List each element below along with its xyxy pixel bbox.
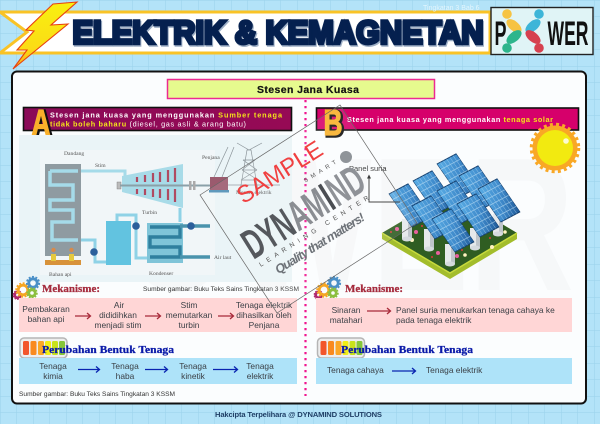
diagram labels: Kondenser <box>149 271 173 277</box>
title: ELEKTRIK & KEMAGNETAN <box>74 16 484 52</box>
turbine <box>117 164 210 208</box>
tank and pipes <box>81 208 180 265</box>
generator <box>209 177 229 192</box>
icon: letter B: B <box>325 103 344 144</box>
logo: POWER: P <box>494 15 506 53</box>
watermark: sample stamp: SAMPLE <box>232 136 328 210</box>
panel: left mechanism flow: Tenaga elektrik <box>236 300 293 310</box>
left energy heading <box>20 338 175 358</box>
title banner <box>0 12 490 53</box>
diagram labels: Air laut <box>214 255 232 261</box>
panel: right mechanism flow: Panel suria menukarkan tenaga cahaya ke <box>396 305 555 315</box>
logo: POWER <box>491 8 593 54</box>
panel: right energy flow: Tenaga elektrik <box>426 365 483 375</box>
panel: left mechanism flow: Penjana <box>249 320 280 330</box>
diagram labels: Bahan api <box>49 272 72 278</box>
right mechanism heading <box>314 277 403 299</box>
panel: section A header <box>24 102 292 144</box>
chapter label: Tingkatan 3 Bab 6 <box>423 5 480 12</box>
boiler <box>45 164 125 265</box>
panel: left mechanism flow: dididihkan <box>99 310 137 320</box>
diagram: power station <box>19 135 292 282</box>
panel: right energy flow <box>316 358 572 384</box>
panel: left energy flow: Tenaga <box>39 361 67 371</box>
panel: left energy flow: kimia <box>43 371 63 381</box>
panel: left energy flow: haba <box>116 371 135 381</box>
watermark: sample stamp <box>200 105 417 313</box>
footer: Hakcipta Terpelihara @ DYNAMIND SOLUTIONS <box>215 410 382 419</box>
heading: Stesen Jana Kuasa: Stesen Jana Kuasa <box>257 84 359 96</box>
panel: left mechanism flow: dihasilkan oleh <box>236 310 292 320</box>
diagram labels: Menara elektrik <box>236 190 272 196</box>
right energy heading: Perubahan Bentuk Tenaga <box>341 345 474 356</box>
panel: left mechanism flow: Pembakaran <box>22 304 70 314</box>
panel: left energy flow: Tenaga <box>179 361 207 371</box>
condenser <box>147 222 210 263</box>
icon: letter B: B <box>324 102 342 143</box>
left mechanism heading <box>13 277 100 299</box>
title: ELEKTRIK & KEMAGNETAN <box>72 14 484 50</box>
image source note: Sumber gambar: Buku Teks Sains Tingkatan 3 KSSM <box>19 391 175 398</box>
watermark: sample stamp: SMART <box>303 160 338 184</box>
callout: panel suria: Panel suria <box>349 164 387 173</box>
panel: section A header: tidak boleh baharu (diesel, gas asli & arang batu) <box>50 120 246 128</box>
callout: panel suria <box>349 164 400 202</box>
panel: section A header: Stesen jana kuasa yang menggunakan Sumber tenaga <box>50 110 283 120</box>
panel: left energy flow: Tenaga <box>111 361 139 371</box>
diagram labels: Penjana <box>202 155 220 161</box>
diagram labels <box>49 151 272 278</box>
divider <box>304 100 307 396</box>
watermark: sample stamp: DYNAMIND <box>233 156 373 268</box>
diagram labels: Turbin <box>142 210 157 216</box>
watermark: sample stamp: LEARNING CENTER <box>258 195 371 269</box>
left mechanism heading: Mekanisme: <box>42 284 100 295</box>
pylon <box>214 143 280 191</box>
watermark: sample stamp: Quality that matters! <box>272 210 367 277</box>
panel: left mechanism flow: bahan api <box>28 314 65 324</box>
diagram labels: Stim <box>95 163 106 169</box>
panel: left energy flow: kinetik <box>181 371 206 381</box>
icon: sun <box>532 124 578 172</box>
icon: lightning bolt <box>13 2 77 69</box>
icon: letter A: A <box>32 102 50 143</box>
panel: left mechanism flow: memutarkan <box>166 310 213 320</box>
right mechanism heading: Mekanisme: <box>345 284 403 295</box>
illustration: solar farm <box>382 154 520 279</box>
right energy heading <box>318 338 474 358</box>
icon: letter A: A <box>33 103 52 144</box>
panel: right mechanism flow: pada tenaga elektrik <box>396 315 472 325</box>
panel: left mechanism flow: Stim <box>181 300 197 310</box>
panel: left energy flow: elektrik <box>247 371 274 381</box>
left energy heading: Perubahan Bentuk Tenaga <box>42 345 175 356</box>
heading: Stesen Jana Kuasa <box>168 80 434 98</box>
panel: right energy flow: Tenaga cahaya <box>327 365 384 375</box>
panel: left mechanism flow: turbin <box>179 320 200 330</box>
panel: left mechanism flow: Air <box>114 300 124 310</box>
panel: left mechanism flow <box>19 298 297 332</box>
panel: left mechanism flow: menjadi stim <box>94 320 142 330</box>
diagram labels: Dandang <box>64 151 84 157</box>
panel: right mechanism flow: Sinaran <box>332 305 361 315</box>
image source note: Sumber gambar: Buku Teks Sains Tingkatan 3 KSSM <box>143 286 299 293</box>
panel: section B header <box>316 102 578 144</box>
panel: right mechanism flow <box>316 298 572 332</box>
panel: left energy flow: Tenaga <box>246 361 274 371</box>
panel: left energy flow <box>19 358 297 384</box>
panel: right mechanism flow: matahari <box>330 315 362 325</box>
panel: section B header: Stesen jana kuasa yang menggunakan tenaga solar <box>347 115 553 124</box>
